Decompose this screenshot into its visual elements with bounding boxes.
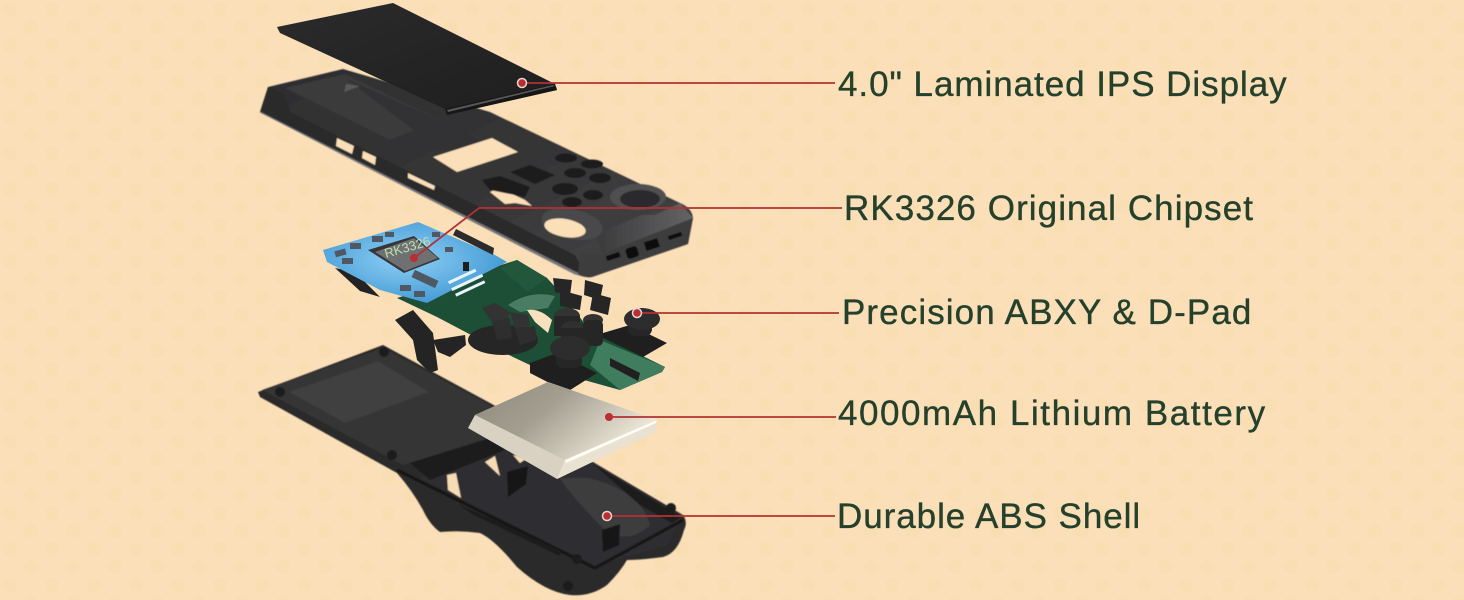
d-pad cluster [468,303,538,355]
face buttons holes [482,154,611,207]
callout: shell: Durable ABS Shell [837,497,1141,536]
trigger bracket [395,310,466,373]
tray floor [420,440,681,566]
callout: battery: 4000mAh Lithium Battery [838,394,1267,433]
callout: buttons [632,293,1252,332]
callout: display: 4.0" Laminated IPS Display [838,65,1288,104]
circuit board: green controller PCB [397,260,665,390]
front rim [578,218,693,277]
outer body [258,345,686,595]
analog stick right [603,308,667,357]
callout: display [518,65,1288,104]
top frame [260,69,693,277]
buttons and D-pad [468,278,667,392]
ABXY cluster [553,278,611,346]
frame cutouts [336,138,532,206]
callout: battery [605,394,1267,433]
analog stick left [530,336,597,392]
circuit board: blue chipset PCB [323,222,507,303]
bottom shell [258,345,686,595]
RK3326 chip: RK3326 [383,234,432,261]
RK3326 chip [368,234,440,273]
battery [468,382,657,479]
callout: buttons: Precision ABXY & D-Pad [842,293,1252,332]
display panel [277,3,557,115]
callout: shell [602,497,1141,536]
callout: chipset [410,189,1254,262]
callout: chipset: RK3326 Original Chipset [844,189,1254,228]
